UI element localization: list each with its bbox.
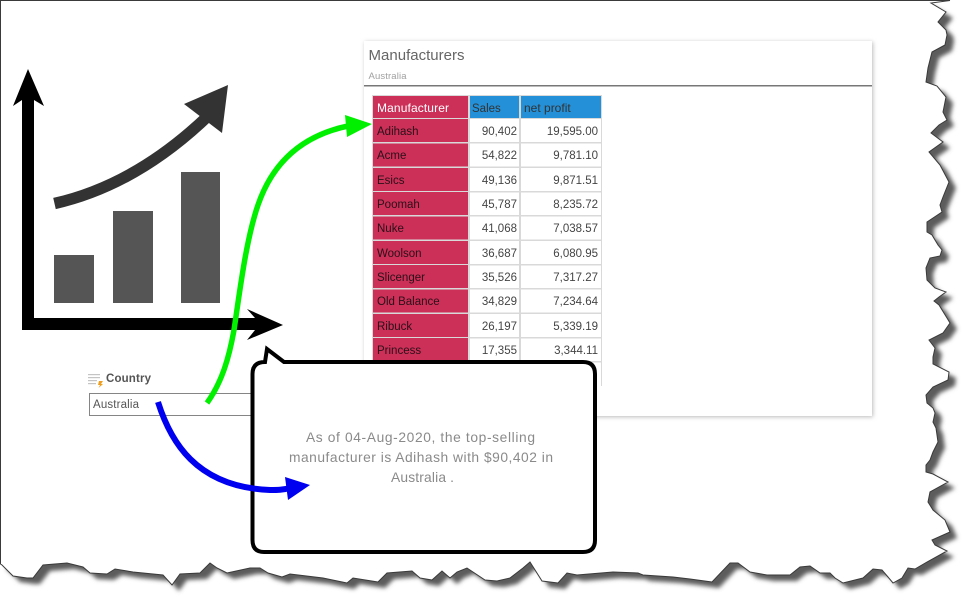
sales values: 26,197 [482, 321, 517, 333]
slicer dropdown: Australia [93, 399, 140, 411]
sales values: 17,355 [482, 345, 517, 357]
icon: slicer filter [88, 374, 103, 388]
sales values: 90,402 [482, 126, 517, 138]
manufacturer names: Acme [377, 150, 406, 162]
table header [373, 96, 601, 118]
table header: Manufacturer [377, 101, 449, 115]
callout: top-selling summary [252, 349, 595, 552]
net profit values: 19,595.00 [547, 126, 598, 138]
callout text [289, 430, 553, 485]
grid lines [470, 119, 601, 386]
manufacturer names: Nuke [377, 223, 404, 235]
sales values: 54,822 [482, 150, 517, 162]
callout text: As of 04-Aug-2020, the top-selling [306, 430, 535, 445]
manufacturer names: Slicenger [377, 272, 425, 284]
slicer label: Country [106, 373, 152, 385]
table header: net profit [524, 101, 571, 115]
manufacturer names: Old Balance [377, 296, 440, 308]
rising trend arrow [54, 85, 228, 204]
slicer: country [88, 373, 264, 416]
table: manufacturers [372, 95, 602, 386]
net profit values: 8,235.72 [553, 199, 598, 211]
net profit values: 9,871.51 [553, 175, 598, 187]
sales values: 45,787 [482, 199, 517, 211]
net profit values: 7,317.27 [553, 272, 598, 284]
sales values [482, 126, 517, 357]
chart bars [54, 172, 220, 303]
manufacturer column cells [373, 119, 468, 361]
net profit values: 3,344.11 [554, 345, 598, 357]
card title: Manufacturers [368, 47, 464, 64]
manufacturer names: Woolson [377, 248, 422, 260]
slicer dropdown [90, 394, 264, 416]
manufacturer names: Adihash [377, 126, 419, 138]
net profit values: 6,080.95 [553, 248, 598, 260]
net profit values [547, 126, 599, 357]
icon: growth chart [13, 69, 283, 340]
callout text: Australia . [391, 470, 454, 485]
panel: manufacturers report card [364, 41, 873, 417]
manufacturer names: Princess [377, 345, 421, 357]
vertical axis arrow [13, 69, 283, 340]
sales values: 35,526 [482, 272, 517, 284]
sales values: 34,829 [482, 296, 517, 308]
manufacturer names: Esics [377, 175, 405, 187]
manufacturer names [377, 126, 440, 357]
net profit values: 7,038.57 [553, 223, 598, 235]
arrow: blue to callout [158, 402, 310, 500]
net profit values: 9,781.10 [553, 150, 598, 162]
sales values: 41,068 [482, 223, 517, 235]
manufacturer names: Ribuck [377, 321, 412, 333]
sales values: 49,136 [482, 175, 517, 187]
net profit values: 5,339.19 [553, 321, 598, 333]
net profit values: 7,234.64 [553, 296, 599, 308]
card subtitle: Australia [368, 71, 407, 82]
table header: Sales [472, 103, 501, 115]
sales values: 36,687 [482, 248, 517, 260]
callout text: manufacturer is Adihash with $90,402 in [289, 450, 553, 465]
arrow: green to table [207, 115, 372, 403]
manufacturer names: Poomah [377, 199, 420, 211]
